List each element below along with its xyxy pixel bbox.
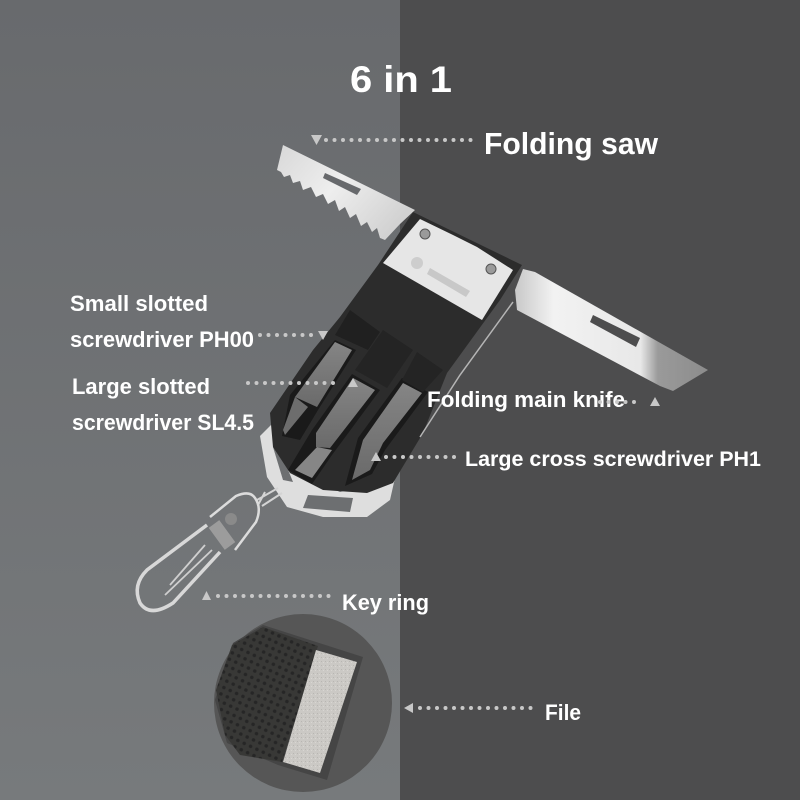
- background: right dark panel: [400, 0, 800, 800]
- side rail: [420, 302, 513, 437]
- icon: large slotted bit blade: [295, 447, 332, 478]
- background: left light panel: [0, 0, 400, 800]
- callout: key ring: Key ring: [342, 590, 429, 615]
- plate: [383, 219, 513, 320]
- callout: folding main knife: Folding main knife: [427, 387, 625, 412]
- icon: small slotted bit: [295, 342, 352, 407]
- slots: [335, 310, 380, 350]
- callout: key ring: [202, 590, 429, 615]
- icon: ring gap: [273, 447, 293, 482]
- callout: folding saw: Folding saw: [484, 126, 659, 161]
- icon: small slotted bit tip: [283, 397, 308, 435]
- icon: silver key ring loop: [260, 423, 395, 517]
- icon: folding main knife blade: [515, 269, 708, 391]
- icon: swivel clasp: [137, 488, 282, 610]
- callout: small slotted screwdriver: [70, 291, 328, 352]
- callout: large slotted screwdriver: screwdriver SL4.5: [72, 410, 254, 435]
- callout: file: File: [545, 700, 581, 725]
- icon: file close-up: [214, 614, 392, 792]
- callout: small slotted screwdriver: Small slotted: [70, 291, 208, 316]
- callout: small slotted screwdriver: screwdriver PH00: [70, 327, 254, 352]
- icon: large cross bit: [352, 383, 422, 480]
- callout: large cross screwdriver: Large cross screwdriver PH1: [465, 448, 761, 471]
- callout: large slotted screwdriver: [72, 374, 358, 435]
- callout: folding saw: [311, 126, 659, 161]
- icon: tool body: [270, 212, 522, 493]
- icon: large slotted bit: [316, 378, 375, 448]
- title: 6 in 1: [350, 59, 452, 100]
- callout: file: [404, 700, 581, 725]
- recess: bit wells: [282, 340, 356, 440]
- callout: large slotted screwdriver: Large slotted: [72, 374, 210, 399]
- icon: ring slot: [303, 495, 353, 512]
- icon: folding saw blade: [277, 145, 415, 240]
